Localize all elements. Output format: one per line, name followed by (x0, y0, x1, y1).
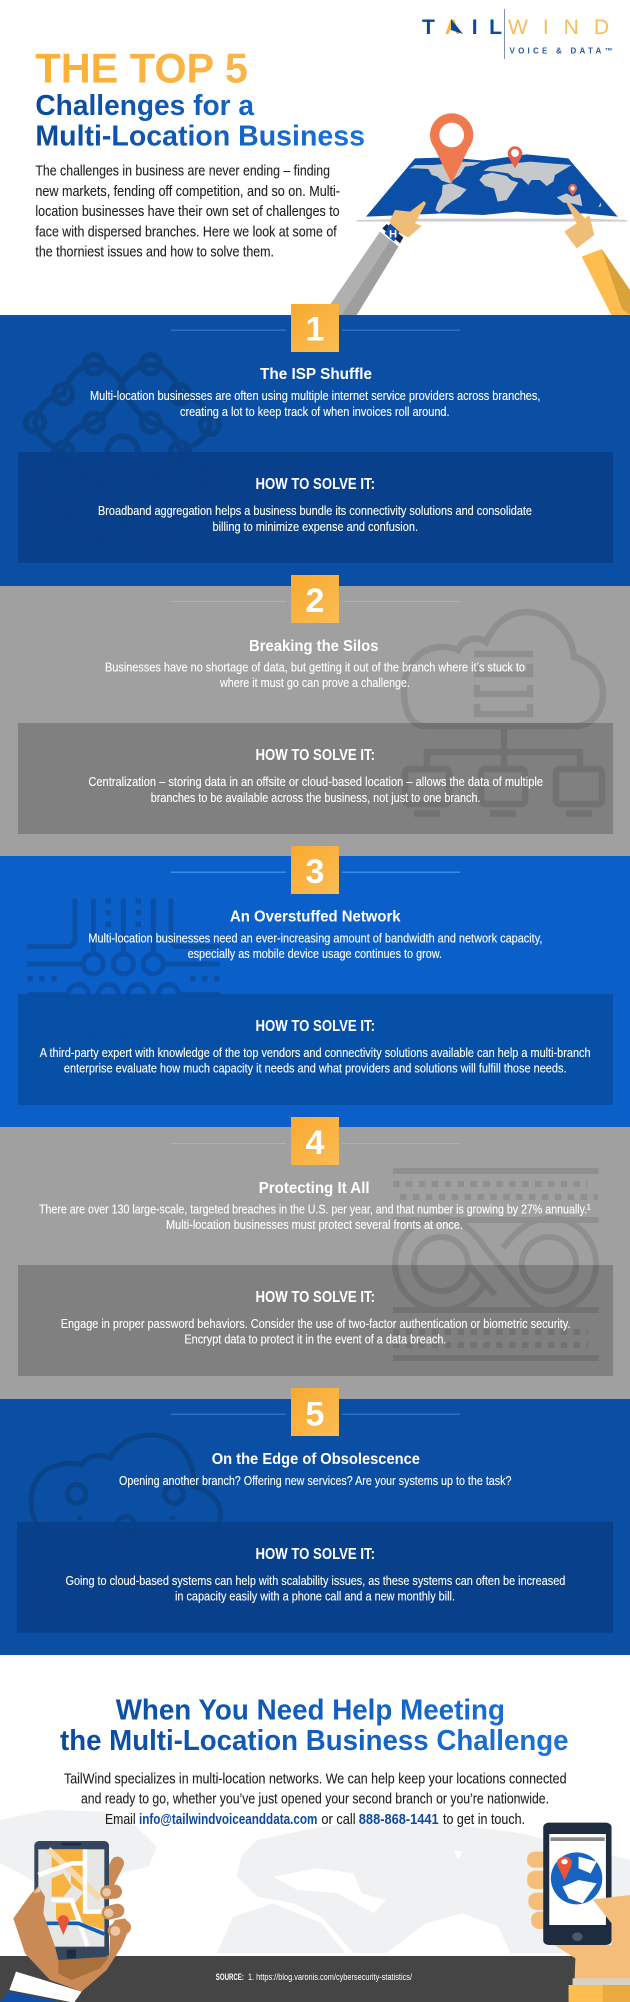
tiny pin (568, 184, 577, 196)
background world map: inland seas (273, 1850, 462, 1913)
intro text: the thorniest issues and how to solve them. (35, 244, 274, 261)
solution box (18, 723, 613, 834)
phone body (34, 1841, 109, 1960)
number badge (171, 846, 460, 894)
solution text: Centralization – storing data in an offsite or cloud-based location – allows the data of multiple (88, 774, 543, 789)
hand (554, 1895, 630, 1980)
challenge text: Opening another branch? Offering new services? Are your systems up to the task? (119, 1473, 512, 1488)
challenge text (90, 388, 540, 419)
closing text: Email (105, 1811, 136, 1828)
challenge text: Businesses have no shortage of data, but getting it out of the branch where it’s stuck to (105, 660, 525, 675)
background icon: circuit board (27, 898, 220, 1090)
panel: challenge 3 (0, 846, 630, 1127)
logo: Tailwind Voice & Data (422, 9, 612, 59)
panel: challenge 2 (0, 575, 630, 856)
background icon: linked network (26, 355, 219, 548)
title: Challenges for a (35, 90, 255, 122)
solution text: in capacity easily with a phone call and a new monthly bill. (175, 1589, 455, 1604)
section background (0, 1127, 630, 1399)
shirt cuff and sleeve (0, 1972, 82, 2002)
solution text: Broadband aggregation helps a business bundle its connectivity solutions and consolidate (98, 503, 532, 518)
logo: Tailwind Voice & Data: WIND (508, 16, 609, 39)
illustration: right hand holding phone with globe (527, 1823, 630, 2002)
solution heading: HOW TO SOLVE IT: (256, 476, 375, 493)
solution box (18, 452, 613, 563)
finger behind phone (107, 1863, 117, 1883)
globe pin (557, 1857, 572, 1881)
closing heading: When You Need Help Meeting (116, 1694, 505, 1726)
intro text: new markets, fending off competition, and so on. Multi- (35, 183, 340, 200)
challenge text (105, 660, 525, 690)
right hand (564, 202, 594, 248)
sleeve (569, 1978, 630, 2002)
solution text: branches to be available across the business, not just to one branch. (151, 790, 480, 805)
challenge text: especially as mobile device usage continues to grow. (188, 946, 442, 961)
challenge text (39, 1202, 591, 1232)
watch: H (389, 228, 397, 240)
solution box (17, 1522, 613, 1633)
intro text: The challenges in business are never ending – finding (35, 163, 330, 180)
challenge text: where it must go can prove a challenge. (219, 675, 410, 690)
solution heading: HOW TO SOLVE IT: (256, 1018, 375, 1035)
title: Multi-Location Business (35, 121, 365, 153)
challenge text (88, 931, 542, 961)
section background (0, 856, 630, 1127)
closing heading: the Multi-Location Business Challenge (60, 1725, 568, 1757)
source line: SOURCE: (216, 1972, 244, 1982)
right arm sleeve (582, 249, 630, 315)
solution text: Encrypt data to protect it in the event of a data breach. (184, 1332, 446, 1347)
logo: Tailwind Voice & Data: T A IL (422, 16, 502, 39)
hand (13, 1886, 131, 1992)
globe (551, 1852, 602, 1904)
solution text (88, 774, 543, 805)
screen header bar (550, 1837, 605, 1841)
background icon: infinity security pattern (393, 1168, 599, 1361)
title (35, 45, 365, 153)
title: THE TOP 5 (35, 45, 248, 92)
closing text: or call (321, 1811, 356, 1828)
phone screen (549, 1834, 606, 1925)
section background (0, 1399, 630, 1655)
number badge: 2 (306, 582, 324, 620)
source line: 1. https://blog.varonis.com/cybersecurity-statistics/ (248, 1972, 412, 1982)
closing text: 888-868-1441 (359, 1811, 439, 1828)
solution heading: HOW TO SOLVE IT: (256, 1289, 375, 1306)
solution text (98, 503, 532, 534)
closing heading (60, 1694, 568, 1757)
number badge: 4 (306, 1124, 325, 1162)
intro text (35, 163, 340, 261)
solution box (18, 1265, 613, 1376)
map (366, 154, 618, 217)
solution heading: HOW TO SOLVE IT: (256, 747, 375, 764)
solution text (61, 1316, 570, 1347)
heading: On the Edge of Obsolescence (212, 1451, 420, 1468)
intro text: location businesses have their own set of challenges to (35, 203, 340, 220)
background world map (0, 1810, 630, 1953)
illustration: world map with pins and pointing hands (323, 113, 630, 315)
phone button (572, 1932, 583, 1941)
number badge (171, 304, 460, 352)
solution text (40, 1045, 591, 1076)
challenge text: Multi-location businesses need an ever-increasing amount of bandwidth and network capacity, (88, 931, 542, 946)
intro text: face with dispersed branches. Here we look at some of (35, 223, 337, 240)
challenge text: Multi-location businesses must protect several fronts at once. (166, 1217, 463, 1232)
number badge (171, 1117, 460, 1165)
solution text: billing to minimize expense and confusion. (212, 519, 418, 534)
watch (382, 223, 403, 243)
section background (0, 315, 630, 586)
number badge: 5 (306, 1396, 324, 1434)
phone button (67, 1949, 76, 1958)
map shadow (357, 219, 627, 222)
challenge text: creating a lot to keep track of when invoices roll around. (180, 404, 450, 419)
small pin (508, 146, 522, 168)
large pin (430, 113, 473, 183)
illustration: left hand holding phone with map (0, 1841, 131, 2002)
number badge: 1 (306, 311, 324, 349)
challenge text: Multi-location businesses are often using multiple internet service providers across branches, (90, 388, 540, 403)
continents (409, 162, 601, 213)
solution text (66, 1573, 565, 1604)
closing text (64, 1770, 566, 1828)
panel: challenge 1 (0, 304, 630, 586)
panel: challenge 5 (0, 1388, 630, 1655)
solution box (18, 994, 613, 1105)
heading: Protecting It All (259, 1180, 370, 1197)
left arm sleeve (323, 232, 398, 315)
logo: Tailwind Voice & Data: VOICE & DATA™ (510, 46, 612, 56)
number badge (171, 1388, 460, 1436)
background icon: cloud with connected nodes (31, 1435, 221, 1619)
heading: An Overstuffed Network (230, 909, 401, 926)
solution heading: HOW TO SOLVE IT: (256, 1546, 375, 1563)
section background (0, 586, 630, 856)
fingers behind phone (527, 1852, 553, 1929)
phone body (543, 1823, 612, 1945)
number badge (171, 575, 460, 623)
closing text: to get in touch. (443, 1811, 525, 1828)
background icon: cloud server network (404, 612, 603, 814)
phone speaker (61, 1843, 81, 1845)
closing text: info@tailwindvoiceanddata.com (139, 1811, 317, 1828)
heading: Breaking the Silos (249, 638, 378, 655)
footer bar (0, 1956, 630, 2002)
left hand (389, 201, 426, 237)
panel: challenge 4 (0, 1117, 630, 1399)
heading: The ISP Shuffle (260, 366, 372, 383)
number badge: 3 (306, 853, 324, 891)
phone screen map (38, 1849, 104, 1947)
